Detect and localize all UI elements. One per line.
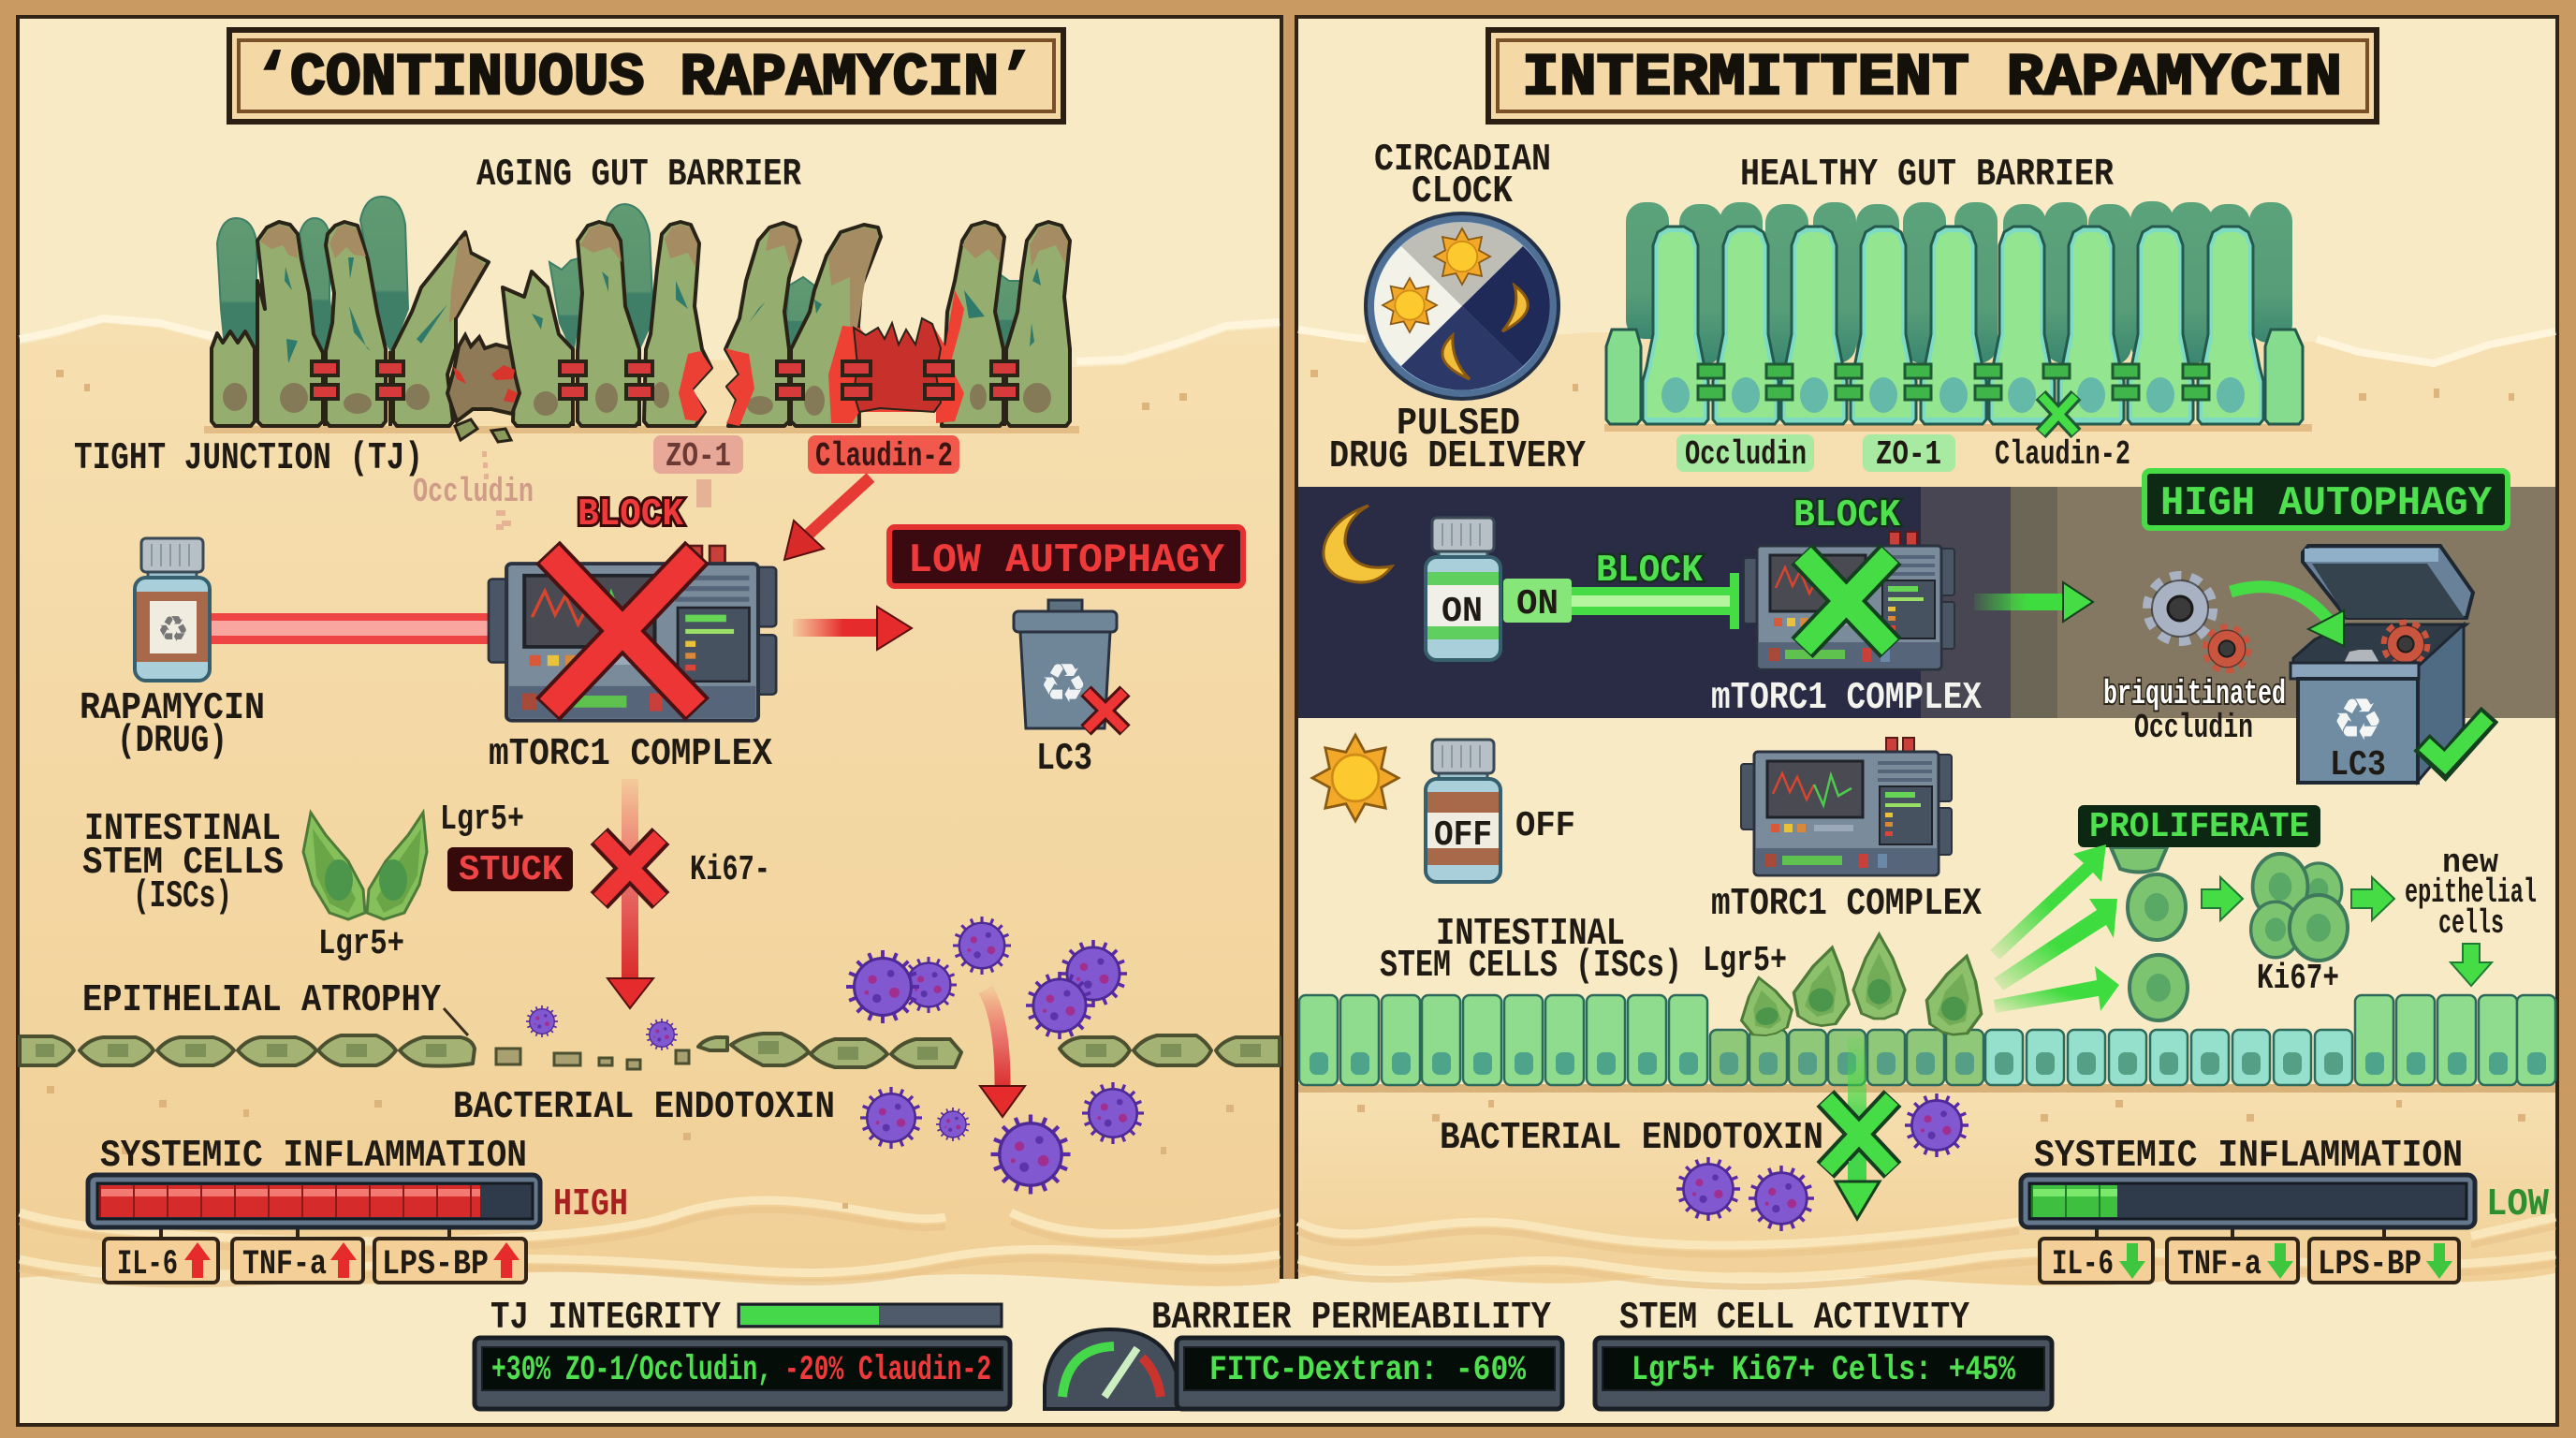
wave lines light bbox=[1298, 1217, 2555, 1277]
arrow: blocked proliferation bbox=[599, 779, 661, 1008]
arrows: stem cell proliferation bbox=[1990, 844, 2119, 1013]
gauge: barrier permeability bbox=[1045, 1329, 1179, 1409]
label: briquitinated occludin: Occludin bbox=[2134, 709, 2253, 747]
label: briquitinated occludin: briquitinated bbox=[2103, 675, 2286, 713]
label: bacterial endotoxin: BACTERIAL ENDOTOXIN bbox=[453, 1086, 835, 1129]
sand specks bbox=[47, 370, 1234, 1209]
footer background bbox=[18, 1279, 2557, 1425]
label: Lgr5+: Lgr5+ bbox=[440, 800, 524, 840]
title: continuous rapamycin: ‘CONTINUOUS RAPAMYCIN’ bbox=[255, 45, 1034, 111]
night band bbox=[1298, 487, 2555, 718]
faded label: occludin: Occludin bbox=[413, 473, 534, 511]
red marks on dead cell bbox=[453, 365, 518, 403]
illustration: healthy villi bbox=[1604, 201, 2312, 433]
inflamed red cell bbox=[828, 290, 964, 423]
label: rapamycin drug: (DRUG) bbox=[117, 720, 227, 763]
tight junctions bbox=[312, 351, 1017, 426]
readout: barrier permeability bbox=[1177, 1338, 1562, 1409]
label: stem cell activity: STEM CELL ACTIVITY bbox=[1619, 1297, 1969, 1340]
brown tips bbox=[260, 225, 1068, 328]
claudin-2 blocked X bbox=[2041, 395, 2076, 433]
tag: TNF-a up bbox=[232, 1239, 363, 1284]
epithelium nuclei bbox=[36, 1041, 1261, 1060]
lid bbox=[2303, 546, 2473, 618]
beam: rapamycin to mTORC1 bbox=[212, 613, 492, 644]
nuclei bbox=[223, 382, 1051, 416]
leader line bbox=[444, 1008, 468, 1035]
progress bar: TJ integrity bbox=[739, 1304, 1002, 1327]
label: block: BLOCK bbox=[578, 493, 683, 536]
label: epithelial atrophy: EPITHELIAL ATROPHY bbox=[82, 979, 441, 1022]
icon: LC3 trash can: ♻ bbox=[1039, 652, 1088, 715]
pill: occludin: Occludin bbox=[1685, 435, 1807, 474]
icon: active mTORC1 machine bbox=[1741, 738, 1952, 875]
footer: metrics strip bbox=[18, 1279, 2557, 1425]
label: block above machine: BLOCK bbox=[1793, 494, 1900, 537]
lower sand bbox=[1298, 1091, 2555, 1285]
cells bbox=[212, 222, 1070, 426]
tag: IL-6 up bbox=[104, 1239, 218, 1284]
sand specks bbox=[1310, 370, 2525, 1122]
thinned epithelium bbox=[20, 1034, 1280, 1067]
label: Lgr5+ lower: Lgr5+ bbox=[318, 924, 404, 964]
label: Ki67-: Ki67- bbox=[690, 850, 770, 890]
icon: on bottle bbox=[1426, 518, 1500, 660]
tag: LPS-BP up: LPS-BP bbox=[382, 1245, 489, 1284]
label: block on beam: BLOCK bbox=[1596, 550, 1703, 593]
badge: proliferate bbox=[2078, 805, 2320, 873]
label: claudin-2: Claudin-2 bbox=[1995, 435, 2130, 474]
back fingers bbox=[217, 197, 1020, 356]
box interior bbox=[2293, 624, 2466, 667]
title: intermittent rapamycin: INTERMITTENT RAPAMYCIN bbox=[1522, 45, 2342, 111]
wave highlight bbox=[20, 318, 1280, 361]
box front bbox=[2298, 679, 2418, 783]
label: mTORC1 complex: mTORC1 COMPLEX bbox=[1711, 677, 1982, 720]
tight junctions bbox=[1698, 364, 2209, 400]
icon: LC3 recycling bin: ♻ bbox=[2332, 685, 2384, 754]
readout: TJ integrity bbox=[475, 1338, 1010, 1409]
label: Ki67+: Ki67+ bbox=[2257, 959, 2339, 999]
arrow: bacteria translocation bbox=[980, 990, 1025, 1117]
label: low: LOW bbox=[2486, 1183, 2549, 1226]
pill: ZO-1: ZO-1 bbox=[666, 437, 731, 476]
meter: low inflammation bbox=[2021, 1175, 2475, 1239]
label: intestinal stem cells: (ISCs) bbox=[133, 875, 232, 918]
icon: circadian clock bbox=[1366, 213, 1559, 399]
label: LC3: LC3 bbox=[1036, 738, 1092, 781]
tag: TNF-a up: TNF-a bbox=[242, 1245, 327, 1284]
badge: proliferate: PROLIFERATE bbox=[2089, 807, 2309, 847]
readout: stem cell activity: Lgr5+ Ki67+ Cells: +45% bbox=[1632, 1351, 2016, 1390]
title: continuous rapamycin bbox=[229, 30, 1063, 122]
icon: gears bbox=[2147, 576, 2248, 670]
eroded edges bbox=[679, 348, 754, 426]
bacteria cluster bbox=[526, 917, 1144, 1195]
icon: LC3 trash can bbox=[1014, 600, 1125, 730]
pill: Claudin-2: Claudin-2 bbox=[815, 437, 953, 476]
icon: on bottle: ON bbox=[1442, 592, 1483, 632]
arrow: to low autophagy bbox=[793, 607, 912, 650]
arrow: blocked endotoxin bbox=[1825, 1037, 1893, 1219]
readout: stem cell activity bbox=[1595, 1338, 2052, 1409]
stem cells bbox=[1734, 934, 1994, 1040]
panel: intermittent rapamycin bbox=[1296, 17, 2557, 1292]
arrow: new cells down bbox=[2451, 944, 2492, 986]
tag: LPS-BP down: LPS-BP bbox=[2318, 1245, 2422, 1284]
label: off: OFF bbox=[1515, 806, 1575, 846]
heading: healthy gut barrier: HEALTHY GUT BARRIER bbox=[1740, 154, 2114, 197]
icon: day sun bbox=[1312, 735, 1398, 821]
title: intermittent rapamycin bbox=[1488, 30, 2377, 122]
wave lines bbox=[20, 1210, 1280, 1284]
wave lines light bbox=[20, 1200, 1280, 1275]
tag: IL-6 down bbox=[2040, 1239, 2153, 1284]
label: circadian clock: CIRCADIAN bbox=[1374, 139, 1551, 182]
icon: LC3 recycling bin bbox=[2291, 546, 2473, 785]
pill: ZO-1: ZO-1 bbox=[1876, 435, 1941, 474]
icon: blocked mTORC1 machine bbox=[1744, 532, 1954, 669]
label: mTORC1 complex: mTORC1 COMPLEX bbox=[1711, 883, 1982, 926]
label: tight junction: TIGHT JUNCTION (TJ) bbox=[74, 437, 423, 480]
label: systemic inflammation: SYSTEMIC INFLAMMATION bbox=[100, 1135, 527, 1178]
proliferating cells bbox=[2128, 854, 2348, 1020]
pill: on bbox=[1503, 579, 1572, 624]
pill: on: ON bbox=[1516, 584, 1559, 624]
icon: check mark bbox=[2422, 714, 2490, 765]
label: barrier permeability: BARRIER PERMEABILITY bbox=[1151, 1297, 1551, 1340]
badge: stuck: STUCK bbox=[459, 850, 563, 890]
illustration: damaged villi bbox=[204, 197, 1079, 442]
label: circadian clock bbox=[1374, 139, 1551, 213]
badge: high autophagy: HIGH AUTOPHAGY bbox=[2160, 480, 2493, 527]
debris bbox=[455, 419, 511, 442]
arrow: into bin bbox=[2231, 587, 2344, 646]
label: new epithelial cells: new bbox=[2442, 844, 2498, 882]
epithelial fragments bbox=[496, 1049, 689, 1069]
label: Lgr5+: Lgr5+ bbox=[1703, 941, 1787, 981]
icon: blocked mTORC1 machine bbox=[489, 546, 776, 721]
label: pulsed drug delivery: PULSED bbox=[1397, 403, 1520, 446]
label: mTORC1 complex: mTORC1 COMPLEX bbox=[489, 733, 772, 776]
beam: on block bbox=[1572, 573, 1739, 629]
upper sand bbox=[1298, 330, 2555, 489]
label: circadian clock: CLOCK bbox=[1412, 170, 1513, 213]
dead cell bbox=[447, 335, 520, 421]
readout: barrier permeability: FITC-Dextran: -60% bbox=[1209, 1351, 1527, 1390]
arrow: to high autophagy bbox=[1974, 582, 2093, 622]
badge: low autophagy: LOW AUTOPHAGY bbox=[908, 537, 1225, 584]
label: bacterial endotoxin: BACTERIAL ENDOTOXIN bbox=[1440, 1117, 1823, 1160]
wave highlight bbox=[1298, 330, 2555, 363]
arrow: to new cells bbox=[2351, 877, 2394, 920]
icon: off bottle: OFF bbox=[1434, 815, 1492, 856]
label: briquitinated occludin bbox=[2103, 675, 2286, 747]
label: high: HIGH bbox=[553, 1183, 628, 1226]
readout: TJ integrity: -20% Claudin-2 bbox=[784, 1351, 991, 1390]
tag: TNF-a down bbox=[2167, 1239, 2298, 1284]
icon: rapamycin bottle bbox=[135, 538, 210, 681]
label: intestinal stem cells bbox=[1380, 913, 1682, 988]
dark streaks bbox=[285, 257, 1041, 363]
wave lines bbox=[1298, 1226, 2555, 1286]
tag: IL-6 down: IL-6 bbox=[2052, 1245, 2114, 1284]
arrow: to cluster bbox=[2202, 877, 2243, 920]
label: intestinal stem cells: INTESTINAL bbox=[1436, 913, 1625, 956]
inflamed core bbox=[854, 318, 941, 412]
readout: TJ integrity: +30% ZO-1/Occludin, bbox=[491, 1351, 772, 1390]
label: rapamycin drug bbox=[80, 687, 265, 763]
heading: aging gut barrier: AGING GUT BARRIER bbox=[476, 154, 801, 197]
icon: rapamycin bottle: ♻ bbox=[157, 609, 189, 650]
box side bbox=[2418, 624, 2464, 782]
label: rapamycin drug: RAPAMYCIN bbox=[80, 687, 265, 730]
label: intestinal stem cells bbox=[82, 808, 284, 918]
icon: off bottle bbox=[1426, 740, 1500, 882]
label: systemic inflammation: SYSTEMIC INFLAMMATION bbox=[2034, 1135, 2463, 1178]
bacteria bbox=[1676, 1093, 1969, 1231]
meter: high inflammation bbox=[88, 1175, 540, 1239]
label: pulsed drug delivery: DRUG DELIVERY bbox=[1329, 435, 1586, 478]
label: TJ integrity: TJ INTEGRITY bbox=[490, 1297, 721, 1340]
tag: IL-6 up: IL-6 bbox=[117, 1245, 178, 1284]
label: intestinal stem cells: STEM CELLS (ISCs) bbox=[1380, 945, 1682, 988]
box lip bbox=[2291, 663, 2419, 679]
icon: stuck stem cells bbox=[303, 813, 427, 919]
base shadow bbox=[204, 426, 1079, 433]
label: intestinal stem cells: INTESTINAL bbox=[84, 808, 281, 851]
icon: night moon bbox=[1324, 506, 1392, 582]
label: intestinal stem cells: STEM CELLS bbox=[82, 842, 284, 885]
label: new epithelial cells: cells bbox=[2438, 904, 2504, 943]
faded debris bbox=[482, 451, 711, 530]
tag: TNF-a down: TNF-a bbox=[2177, 1245, 2261, 1284]
icon: LC3 recycling bin: LC3 bbox=[2330, 745, 2386, 785]
label: pulsed drug delivery bbox=[1329, 403, 1586, 478]
arrow: claudin-2 to mTORC1 bbox=[784, 477, 871, 560]
sand background bbox=[20, 323, 1280, 1286]
label: new epithelial cells bbox=[2405, 844, 2537, 943]
panel: continuous rapamycin bbox=[18, 17, 1281, 1292]
healthy epithelium bbox=[1298, 995, 2555, 1093]
